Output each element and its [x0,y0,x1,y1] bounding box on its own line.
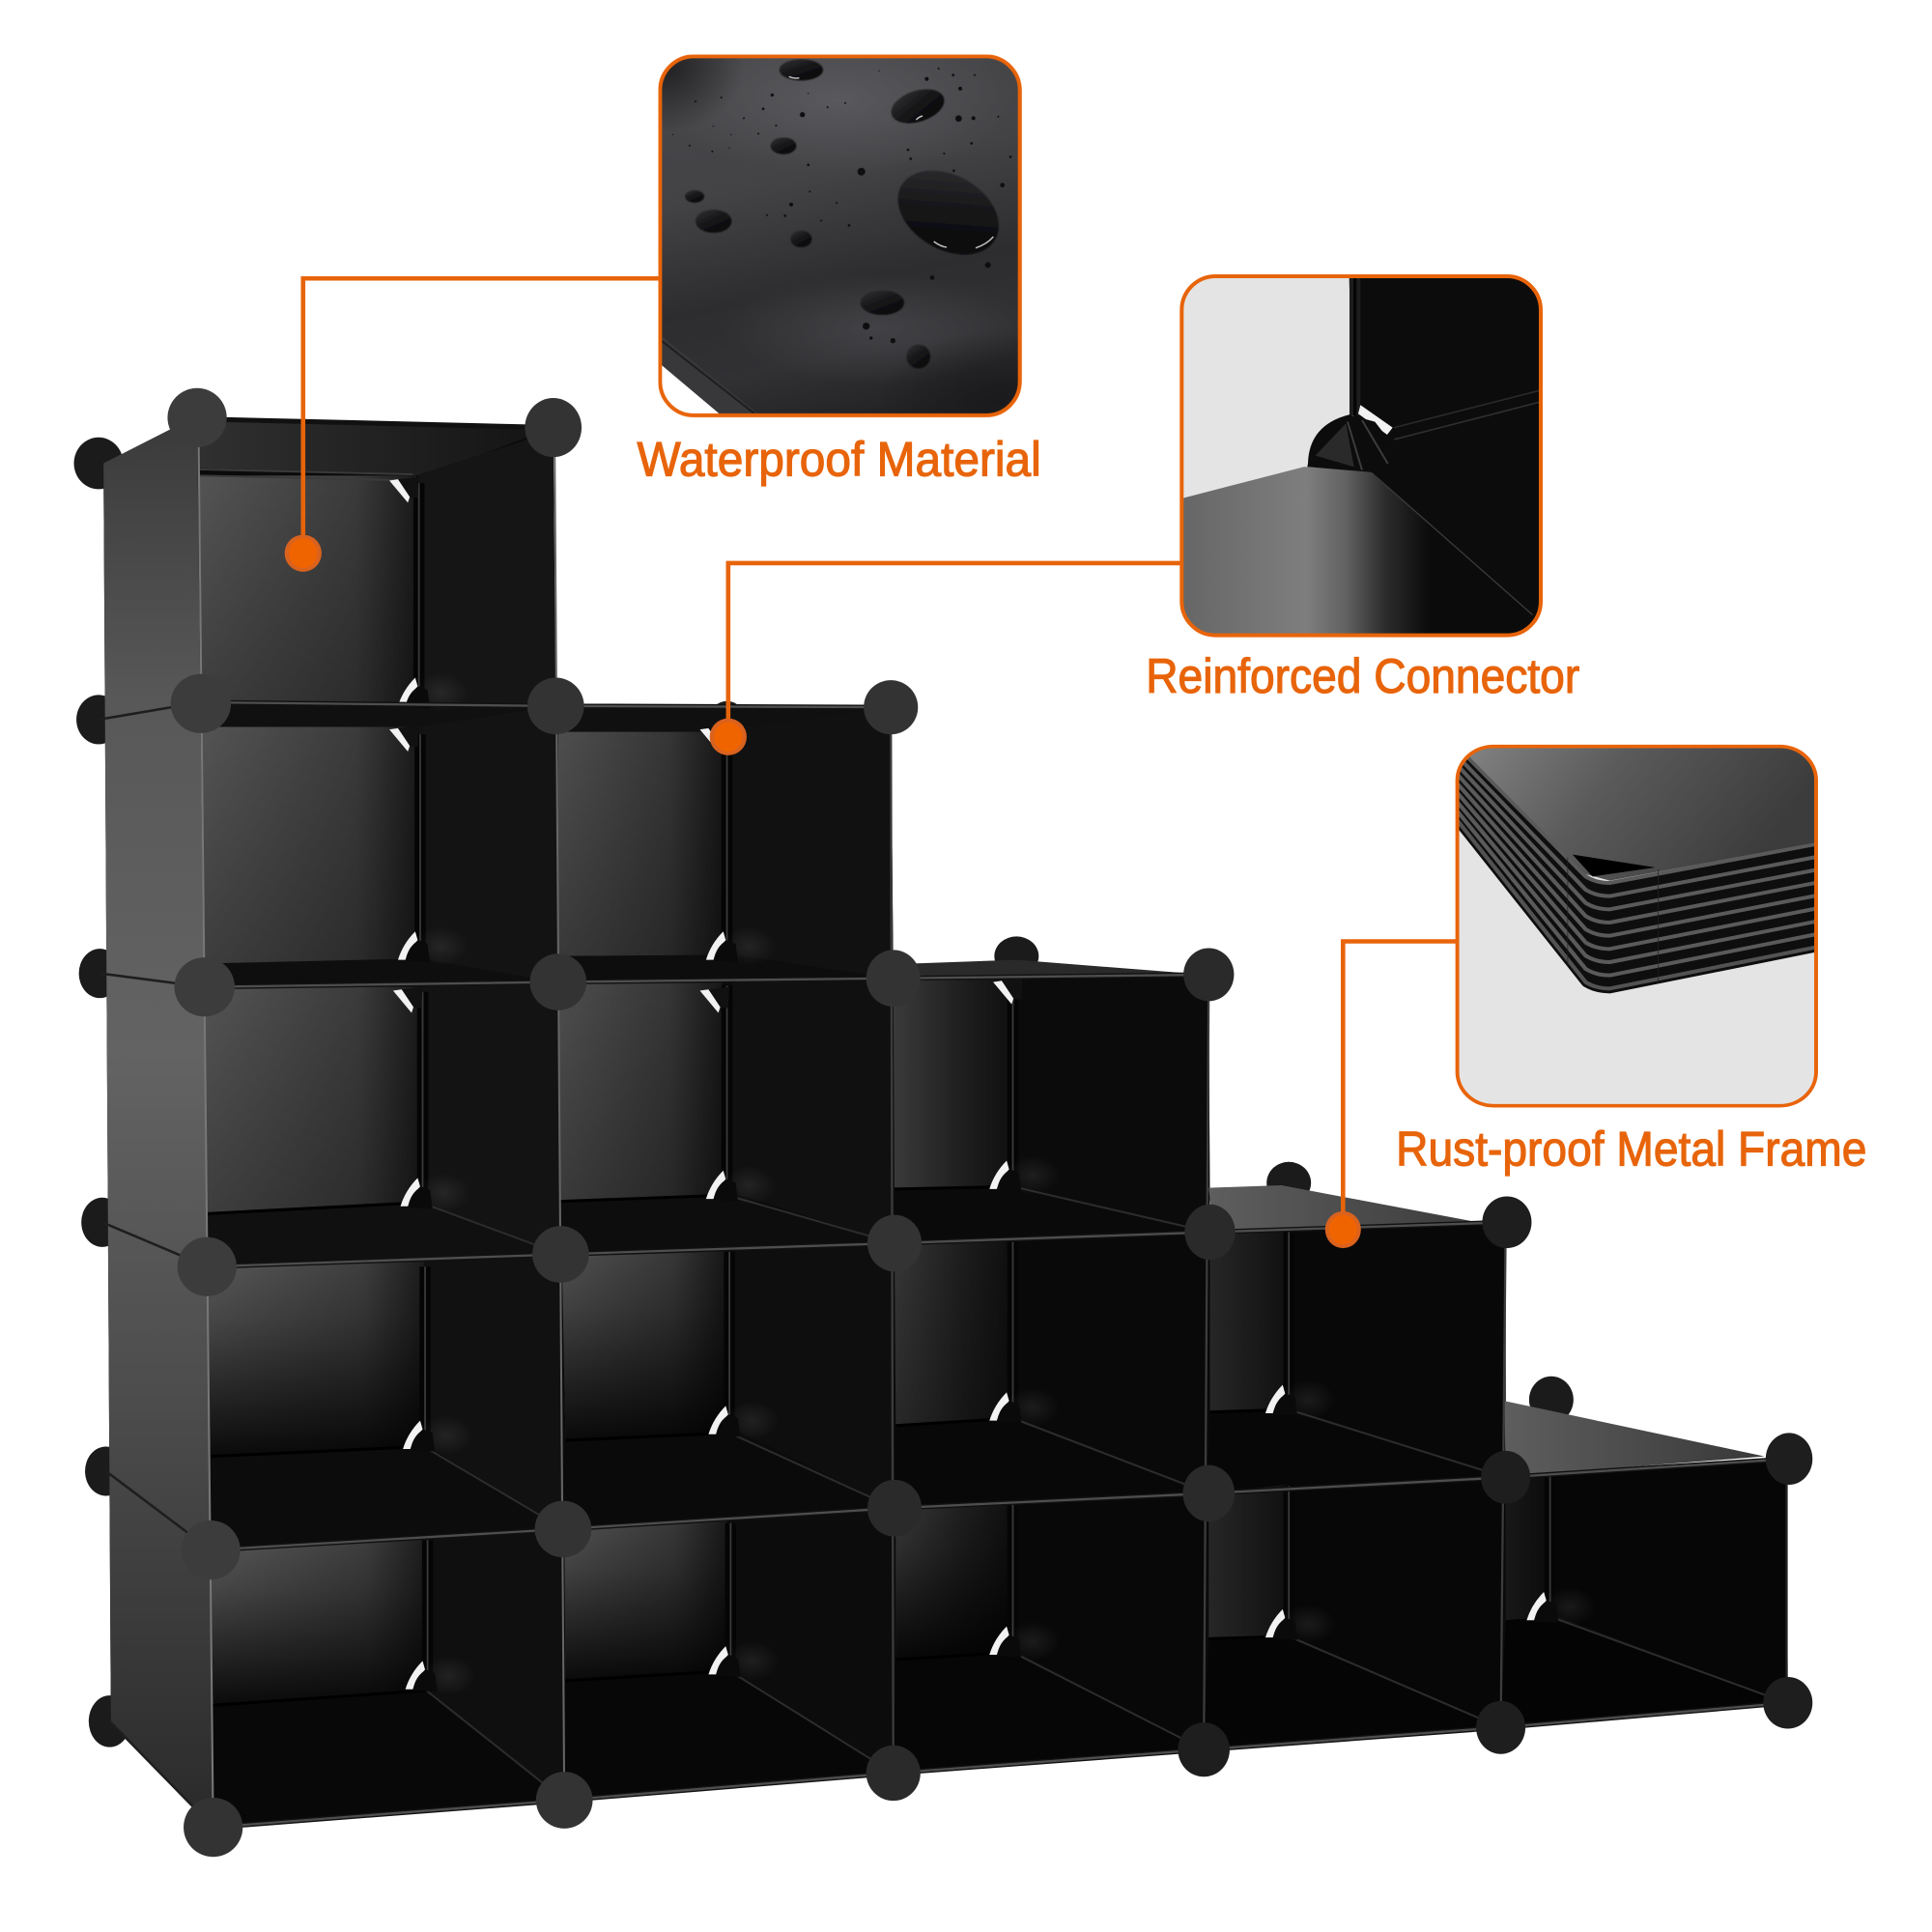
back vertical posts [419,483,1550,1690]
cube A row 4 [207,1254,563,1550]
cube C row 1 [894,975,1210,1243]
caption: rust-proof metal frame: Rust-proof Metal Frame [1396,1122,1866,1177]
plate seams [1568,857,1658,983]
black corner triangle [1573,855,1656,876]
fine water specks [672,68,1011,343]
cube A row 1 [197,419,555,708]
cube C row 3 [894,1493,1208,1773]
column C: three stacked cubes [894,960,1210,1773]
panel: reinforced connector close-up [1181,276,1543,638]
icon: water droplets [685,59,1013,368]
cube B row 1 [558,707,894,982]
panel: rust-proof metal frame close-up [1440,726,1820,1106]
column B: four stacked cubes [555,707,895,1801]
cube B row 2 [559,979,895,1254]
caption: waterproof material: Waterproof Material [637,432,1041,486]
icon: reinforced corner connector [1307,414,1389,472]
cube A row 2 [201,703,558,987]
panel: waterproof material close-up [659,54,1022,417]
floor diagonal edge lines [207,1186,1786,1801]
leader line: waterproof material [285,278,662,572]
cube A row 5 [211,1529,564,1828]
column A: five stacked cubes [197,419,564,1828]
cube C row 2 [895,1233,1210,1508]
column D: two stacked cubes [1204,1185,1506,1749]
soft surface lighting [663,58,1009,408]
grey floor panel [1181,467,1543,638]
cube D row 2 [1204,1477,1506,1749]
top plate surface [1470,748,1814,881]
left side panel of the shelf [103,419,213,1828]
caption: reinforced connector: Reinforced Connector [1146,649,1579,703]
plate edge and white corner [660,335,760,415]
column E: single cube [1501,1401,1786,1727]
leader line: rust-proof metal frame [1325,941,1459,1248]
cube B row 4 [564,1508,895,1801]
leader line: reinforced connector [710,563,1182,755]
front frame bars [99,419,1789,1828]
rear connector hubs on left side [74,438,1574,1747]
shelf dark base silhouette [103,419,1788,1828]
cube A row 3 [205,982,560,1266]
cube D row 1 [1208,1222,1506,1493]
cube B row 3 [562,1243,895,1529]
icon: stacked metal frame plates [1459,757,1814,993]
front connector hubs [167,388,1812,1857]
black side panels [1350,276,1543,638]
frame bars and strip [1355,276,1541,615]
corner connectors with white gaps [389,477,1597,1695]
droplet highlights [789,76,993,248]
